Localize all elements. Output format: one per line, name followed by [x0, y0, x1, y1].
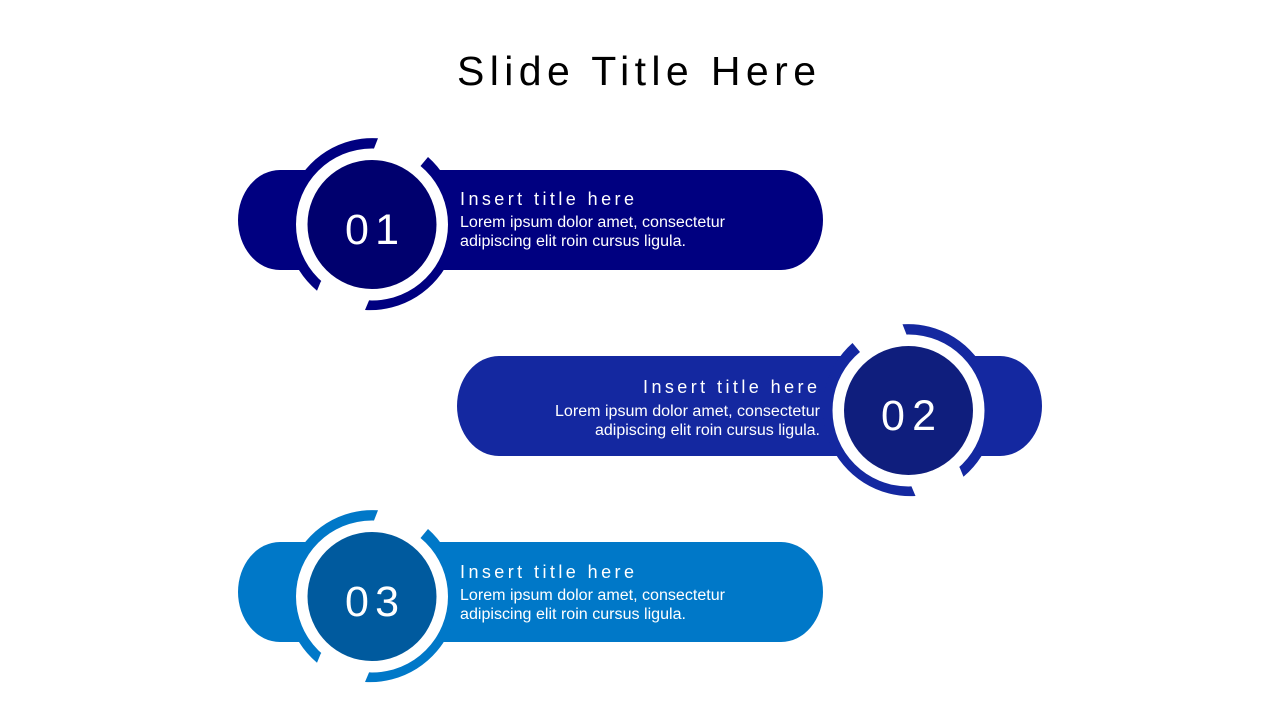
arc upper 03 [286, 510, 378, 663]
item body 03: Lorem ipsum dolor amet, consectetur [460, 587, 725, 604]
panel: item 01 [238, 138, 823, 310]
bar 02 [457, 356, 1042, 456]
bar 01 [238, 170, 823, 270]
panel: item 02 [457, 324, 1042, 496]
white ring 02 [832, 334, 984, 486]
item heading 02: Insert title here [643, 377, 817, 397]
item body 01: adipiscing elit roin cursus ligula. [460, 233, 686, 250]
panel: item 03 [238, 510, 823, 682]
arc lower 01 [365, 157, 458, 310]
item body 03: adipiscing elit roin cursus ligula. [460, 606, 686, 623]
item body 02 [555, 403, 820, 439]
circle 02 [844, 346, 973, 475]
circle 01 [308, 160, 436, 289]
item heading 03: Insert title here [460, 562, 634, 582]
number 03: 03 [345, 578, 399, 626]
white ring 01 [296, 148, 448, 300]
white ring 03 [296, 520, 448, 672]
title: Slide Title Here [457, 48, 816, 94]
item body 03 [460, 587, 725, 623]
arc upper 02 [902, 324, 995, 477]
circle 03 [308, 532, 436, 661]
number 02: 02 [881, 392, 936, 440]
bar 03 [238, 542, 823, 642]
item heading 01: Insert title here [460, 189, 634, 209]
arc upper 01 [286, 138, 378, 291]
item body 02: adipiscing elit roin cursus ligula. [595, 422, 820, 439]
number 01: 01 [345, 206, 399, 254]
arc lower 02 [823, 343, 916, 496]
item body 01: Lorem ipsum dolor amet, consectetur [460, 214, 725, 231]
item body 01 [460, 214, 725, 250]
item body 02: Lorem ipsum dolor amet, consectetur [555, 403, 820, 420]
arc lower 03 [365, 529, 458, 682]
